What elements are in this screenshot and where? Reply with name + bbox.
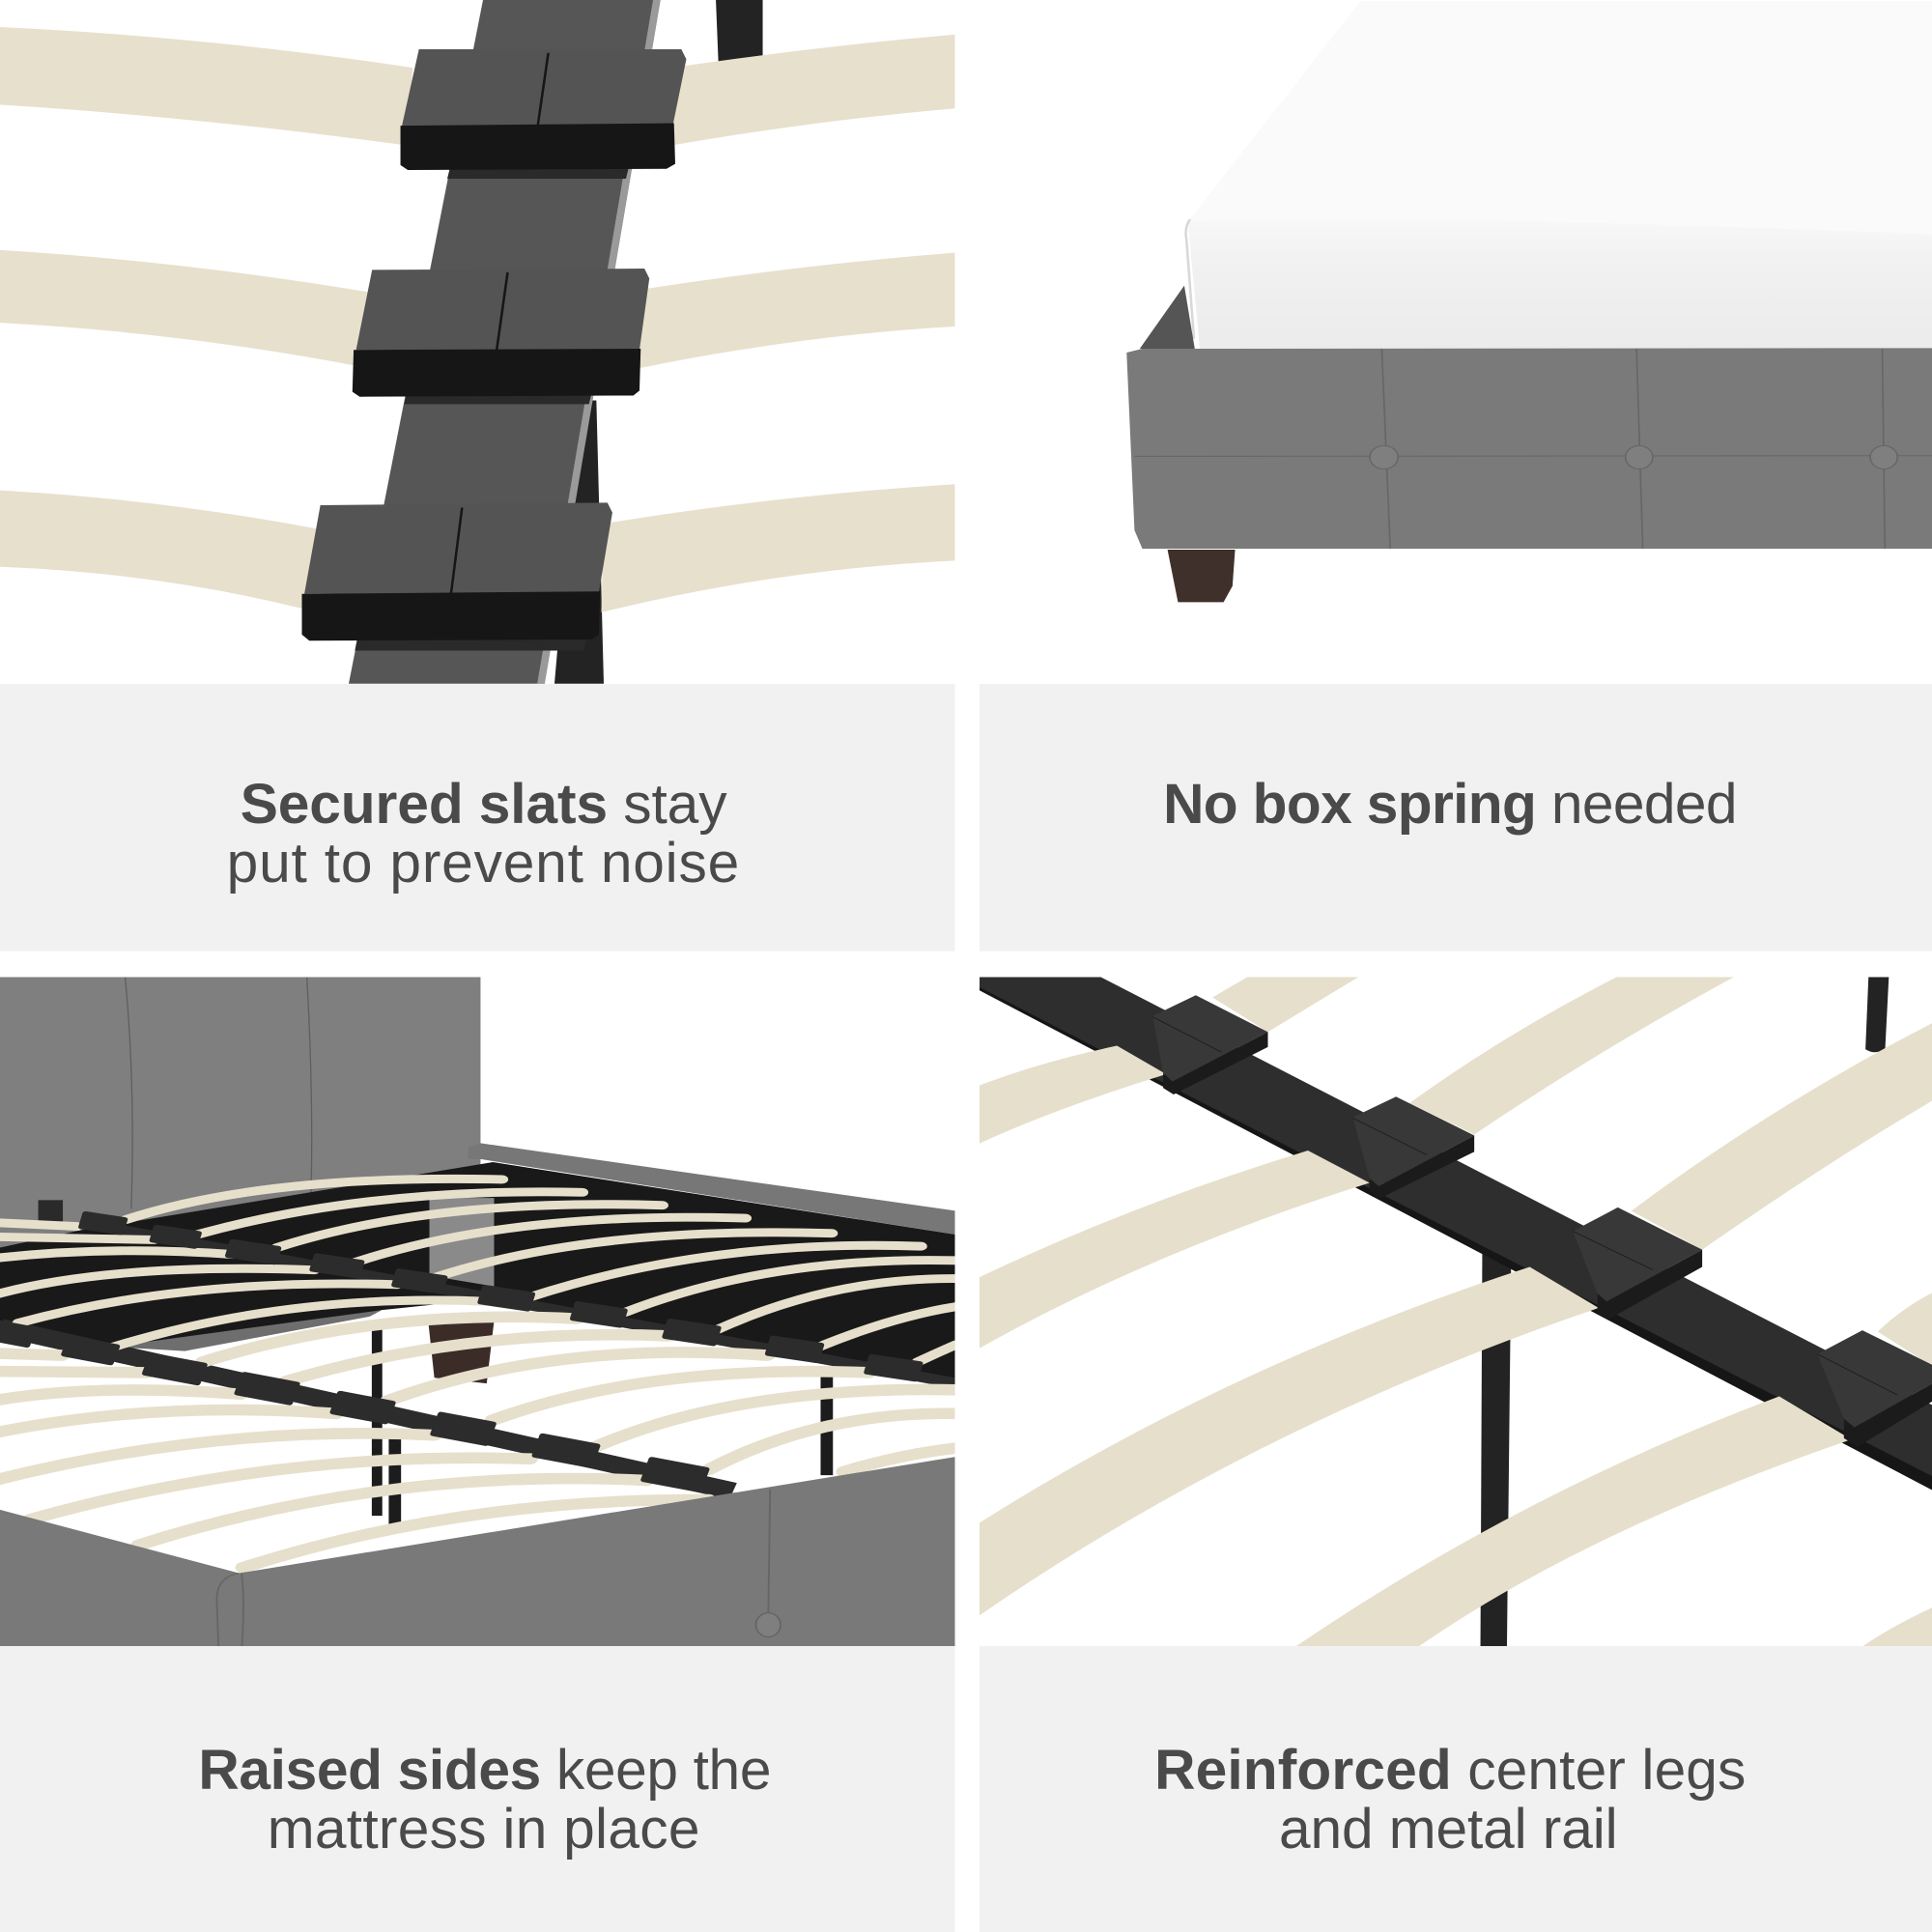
wooden foot far <box>428 1321 494 1383</box>
footboard upholstery <box>1126 348 1932 549</box>
metal center legs <box>1481 976 1889 1649</box>
slat bracket 2 <box>353 269 649 397</box>
mattress side <box>1188 218 1932 352</box>
center rail <box>349 0 661 684</box>
caption text: secured slats: Secured slats stay <box>241 773 727 836</box>
caption text: raised sides <box>198 1739 771 1861</box>
slat bracket 3 <box>301 502 612 640</box>
headboard <box>0 976 480 1252</box>
caption text: secured slats: put to prevent noise <box>227 832 739 895</box>
rear slats <box>1212 976 1932 1366</box>
wooden slats <box>0 27 955 612</box>
panel: no box spring photo <box>1126 218 1932 603</box>
dark understructure <box>0 1162 956 1383</box>
front slats <box>979 1046 1932 1649</box>
metal leg behind bottom <box>554 401 604 684</box>
wooden foot <box>1168 550 1236 602</box>
panel: raised sides photo <box>0 976 956 1653</box>
center and front rails <box>0 1223 956 1492</box>
metal leg behind top <box>716 0 763 62</box>
caption text: reinforced legs <box>1154 1739 1746 1861</box>
metal legs <box>377 1321 827 1529</box>
mattress piping <box>1186 219 1194 339</box>
mattress top <box>1188 1 1932 234</box>
front side rail upholstery <box>0 1457 956 1653</box>
caption panel: secured slats <box>0 684 955 952</box>
panel: reinforced legs photo <box>979 976 1932 1649</box>
slat bracket 2 <box>1353 1096 1474 1199</box>
grey floor patch <box>111 1310 382 1351</box>
caption text: secured slats <box>227 773 739 895</box>
tufted buttons <box>1370 445 1897 469</box>
slats <box>0 1179 956 1568</box>
slat bracket 3 <box>1573 1208 1702 1320</box>
caption text: no box spring: No box spring needed <box>1163 773 1737 836</box>
slat bracket 4 <box>1817 1330 1932 1447</box>
caption text: raised sides: Raised sides keep the <box>198 1739 771 1802</box>
caption panel: raised sides <box>0 1646 955 1932</box>
floor gap <box>430 1198 494 1287</box>
bracket on headboard <box>39 1200 63 1222</box>
tufting seams <box>1134 349 1932 549</box>
panel: secured slats photo <box>0 0 955 684</box>
caption text: reinforced legs: Reinforced center legs <box>1154 1739 1746 1802</box>
slat bracket 1 <box>1152 995 1267 1094</box>
caption panel: no box spring <box>980 684 1932 952</box>
slat bracket 1 <box>401 49 686 170</box>
slat brackets <box>0 1211 923 1492</box>
caption panel: reinforced legs <box>980 1646 1932 1932</box>
far side rail <box>469 1143 956 1235</box>
caption text: raised sides: mattress in place <box>268 1798 699 1861</box>
black center rail <box>979 976 1932 1490</box>
frame inner corner <box>1140 286 1195 349</box>
caption text: reinforced legs: and metal rail <box>1279 1798 1618 1861</box>
